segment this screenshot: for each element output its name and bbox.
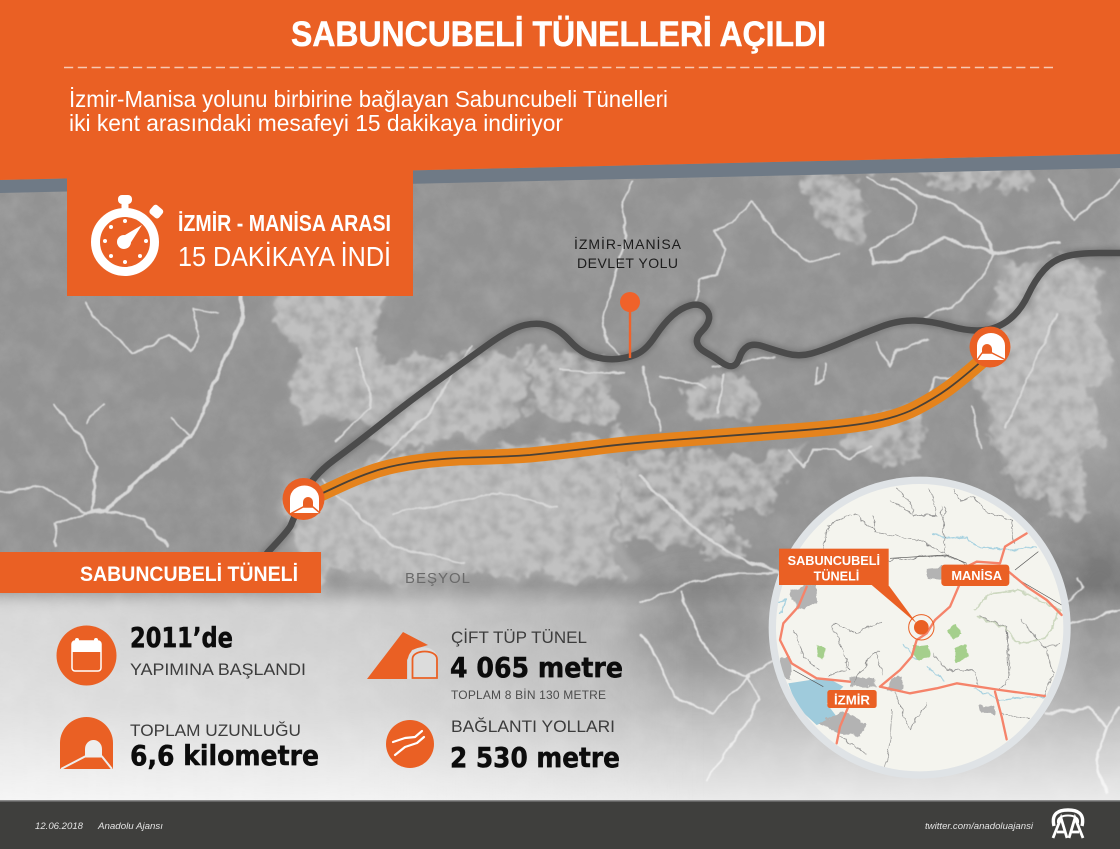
stat: double tube tunnel bbox=[367, 628, 623, 702]
marker: tunnel location bbox=[909, 615, 934, 640]
icon: east tunnel portal bbox=[970, 326, 1010, 368]
footer date and agency: Anadolu Ajansı bbox=[97, 821, 164, 831]
subtitle: iki kent arasındaki mesafeyi 15 dakikaya indiriyor bbox=[69, 110, 563, 136]
subtitle bbox=[69, 86, 668, 136]
footer bar bbox=[0, 800, 1120, 849]
stat: construction start: YAPIMINA BAŞLANDI bbox=[130, 660, 306, 679]
main highways bbox=[780, 533, 1062, 743]
city label: Manisa bbox=[941, 565, 1009, 586]
stat: total length: 6,6 kilometre bbox=[130, 740, 319, 772]
stat: connection roads: 2 530 metre bbox=[450, 742, 620, 774]
footer date and agency bbox=[35, 821, 164, 831]
stat: double tube tunnel: ÇİFT TÜP TÜNEL bbox=[451, 628, 587, 647]
icon: tunnel bbox=[60, 717, 113, 769]
label: state road bbox=[574, 235, 682, 271]
header shadow band bbox=[0, 154, 1120, 193]
label: state road: DEVLET YOLU bbox=[577, 255, 678, 271]
city label: Izmir bbox=[827, 690, 877, 708]
sea bbox=[788, 678, 843, 725]
stat: connection roads: BAĞLANTI YOLLARI bbox=[451, 717, 615, 736]
footer social link: twitter.com/anadoluajansi bbox=[925, 821, 1034, 832]
icon: west tunnel portal bbox=[282, 478, 324, 520]
stat: total length: TOPLAM UZUNLUĞU bbox=[130, 721, 301, 740]
inset locator map bbox=[769, 477, 1071, 779]
logo: AA bbox=[1053, 810, 1083, 838]
callout: tunnel location: TÜNELİ bbox=[814, 569, 859, 584]
panel value: 15 DAKİKAYA İNDİ bbox=[178, 241, 391, 272]
icon: calendar bbox=[56, 626, 116, 686]
panel heading: İZMİR - MANİSA ARASI bbox=[178, 210, 391, 236]
icon: road curves bbox=[386, 720, 434, 768]
urban areas bbox=[780, 567, 995, 737]
stat: total length bbox=[60, 717, 319, 772]
icon: stopwatch bbox=[96, 195, 164, 272]
parks bbox=[817, 623, 968, 663]
subtitle: İzmir-Manisa yolunu birbirine bağlayan Sabuncubeli Tünelleri bbox=[69, 86, 668, 112]
section heading bar: SABUNCUBELİ TÜNELİ bbox=[80, 563, 298, 586]
place label: Beşyol: BEŞYOL bbox=[405, 570, 470, 587]
stat: double tube tunnel: 4 065 metre bbox=[450, 652, 623, 684]
stat: construction start: 2011’de bbox=[130, 622, 233, 654]
label: state road: İZMİR-MANİSA bbox=[574, 235, 682, 252]
city label: Manisa: MANİSA bbox=[951, 568, 1002, 583]
callout: tunnel location bbox=[779, 549, 917, 623]
stat: double tube tunnel: TOPLAM 8 BİN 130 METRE bbox=[451, 688, 606, 702]
icon: mountain tunnel bbox=[367, 632, 438, 679]
header banner bbox=[0, 0, 1120, 180]
stat: connection roads bbox=[386, 717, 620, 774]
existing road: Izmir-Manisa state highway bbox=[262, 253, 1120, 560]
stat: construction start bbox=[56, 622, 306, 686]
footer date and agency: 12.06.2018 bbox=[35, 821, 83, 831]
city label: Izmir: İZMİR bbox=[834, 692, 870, 707]
background satellite map bbox=[0, 150, 1120, 826]
info panel: travel time bbox=[67, 165, 413, 296]
title: SABUNCUBELİ TÜNELLERİ AÇILDI bbox=[291, 15, 826, 54]
pin marker bbox=[620, 292, 640, 358]
new tunnel route bbox=[310, 360, 983, 499]
callout: tunnel location: SABUNCUBELİ bbox=[788, 553, 880, 568]
section heading bar bbox=[0, 552, 321, 593]
